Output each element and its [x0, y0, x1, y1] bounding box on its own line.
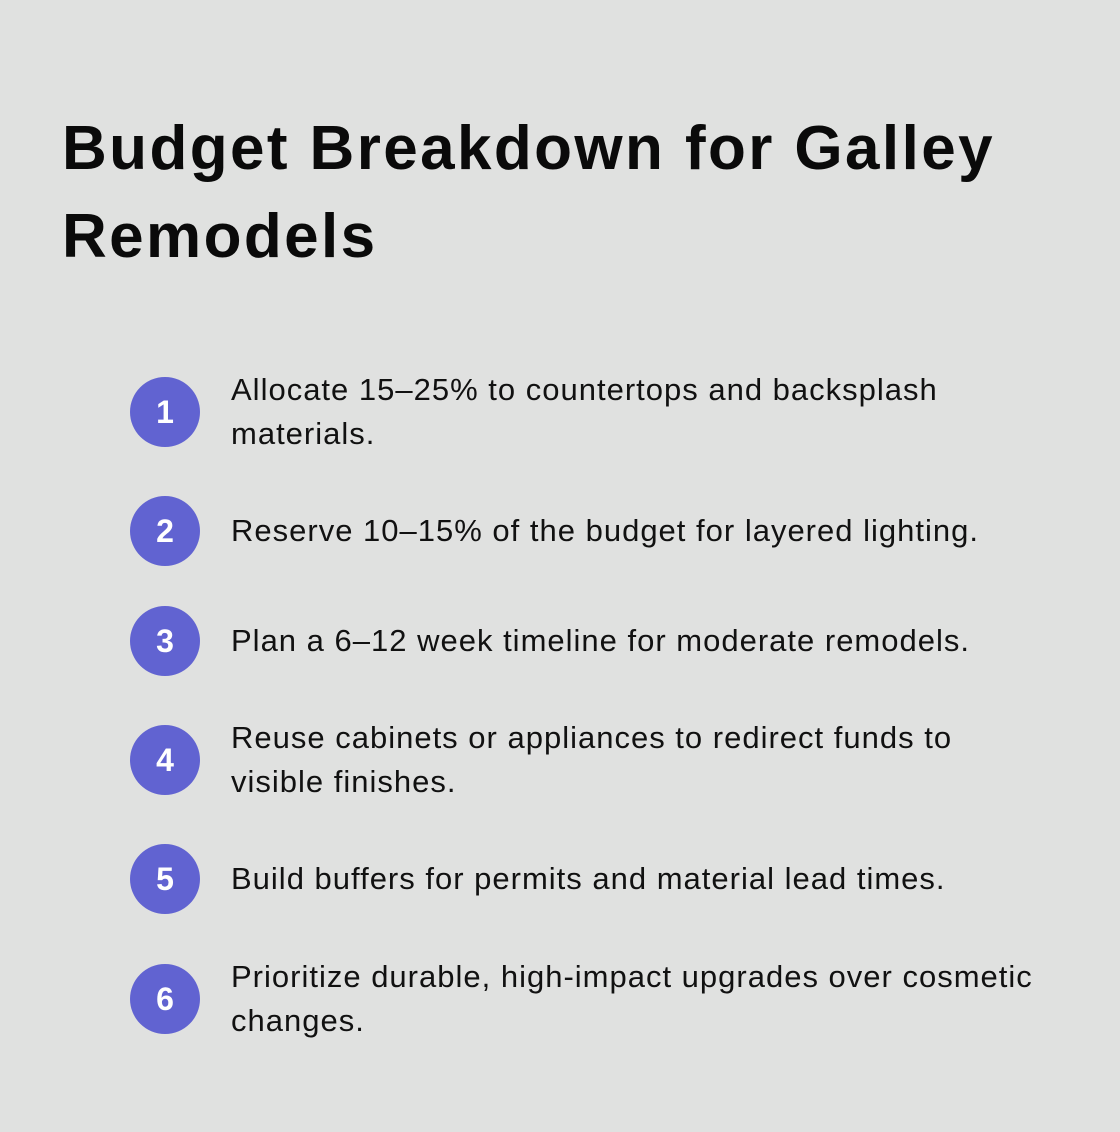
- number badge 1: 1: [156, 394, 174, 430]
- item 5 text: Build buffers for permits and material lead times.: [231, 861, 946, 896]
- item 3 text: Plan a 6–12 week timeline for moderate remodels.: [231, 623, 970, 658]
- item 1: [130, 372, 938, 451]
- item 4 text: Reuse cabinets or appliances to redirect funds to visible finishes.: [231, 720, 952, 799]
- number badge 4: [130, 725, 200, 795]
- item 2: [130, 496, 979, 566]
- item 4: [130, 720, 952, 799]
- number badge 3: 3: [156, 622, 174, 658]
- item 5: [130, 844, 946, 914]
- number badge 6: 6: [156, 980, 174, 1016]
- number badge 5: 5: [156, 860, 174, 896]
- number badge 3: [130, 606, 200, 676]
- item 6 text: Prioritize durable, high-impact upgrades over cosmetic changes.: [231, 959, 1033, 1038]
- title: Remodels: [62, 202, 378, 271]
- number badge 5: [130, 844, 200, 914]
- number badge 1: [130, 377, 200, 447]
- title: [62, 114, 995, 271]
- number badge 6: [130, 964, 200, 1034]
- number badge 4: 4: [156, 742, 174, 778]
- item 2 text: Reserve 10–15% of the budget for layered lighting.: [231, 513, 979, 548]
- number badge 2: [130, 496, 200, 566]
- title: Budget Breakdown for Galley: [62, 114, 995, 183]
- item 3: [130, 606, 970, 676]
- item 1 text: Allocate 15–25% to countertops and backsplash materials.: [231, 372, 938, 451]
- number badge 2: 2: [156, 512, 174, 548]
- item 6: [130, 959, 1033, 1038]
